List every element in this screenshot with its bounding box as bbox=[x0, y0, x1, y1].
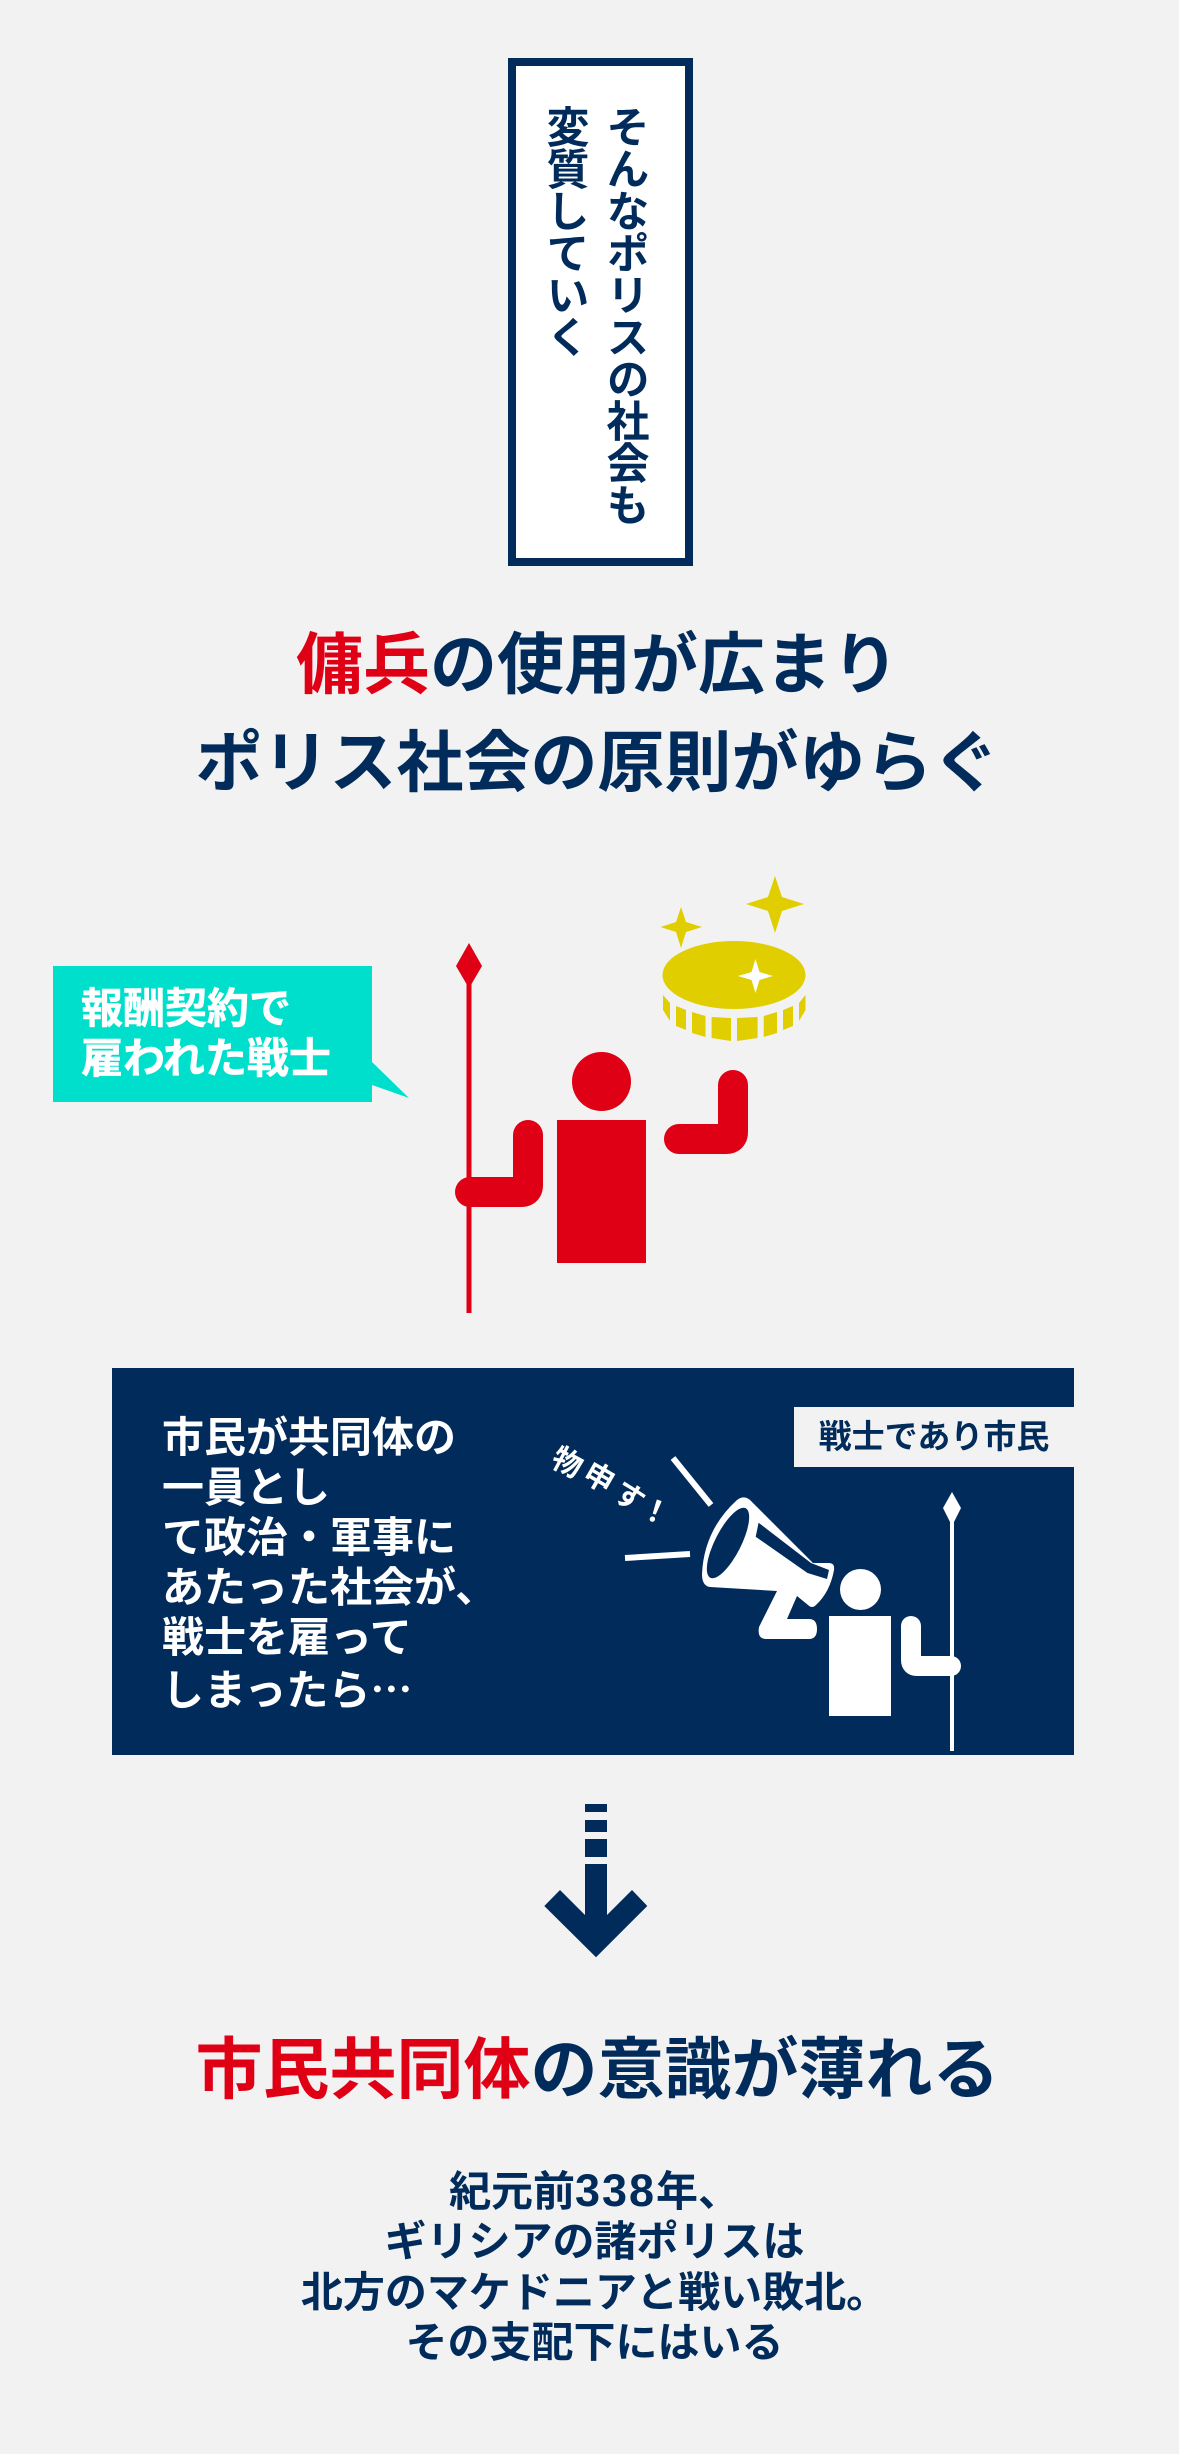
panel text: 一員とし bbox=[162, 1464, 330, 1511]
heading: civic community fades: 市民共同体の意識が薄れる bbox=[196, 2033, 1000, 2108]
icon: sparkle small bbox=[660, 907, 702, 948]
vertical text: そんなポリスの社会も bbox=[600, 105, 648, 525]
callout tail bbox=[371, 1061, 409, 1098]
illustration: soldier and coin bbox=[372, 876, 806, 1313]
vertical text: 変質していく bbox=[540, 105, 588, 357]
rotated text: speak up: 物 bbox=[546, 1442, 588, 1485]
conclusion text: その支配下にはいる bbox=[405, 2319, 784, 2366]
rays bbox=[625, 1458, 711, 1558]
heading: mercenaries: ポリス社会の原則がゆらぐ bbox=[196, 726, 1000, 801]
panel text: あたった社会が、 bbox=[162, 1564, 497, 1611]
rotated text: speak up: 申 bbox=[578, 1457, 620, 1500]
icon: white soldier bbox=[829, 1492, 961, 1751]
heading: mercenaries: 傭兵の使用が広まり bbox=[296, 628, 899, 703]
arrow: down bbox=[544, 1804, 647, 1957]
conclusion text: ギリシアの諸ポリスは bbox=[384, 2218, 804, 2265]
conclusion text bbox=[301, 2165, 888, 2366]
panel text: 市民が共同体の bbox=[162, 1414, 456, 1461]
panel: citizen soldiers bbox=[112, 1368, 1074, 1755]
rotated text: speak up: す bbox=[607, 1475, 650, 1519]
icon: sparkle large bbox=[746, 876, 804, 933]
heading: mercenaries bbox=[196, 628, 1000, 801]
icon: sparkle on coin bbox=[738, 959, 773, 993]
rotated text: speak up: ！ bbox=[635, 1492, 675, 1533]
conclusion text: 紀元前338年、 bbox=[449, 2165, 740, 2216]
panel text: 戦士を雇って bbox=[162, 1614, 412, 1661]
icon: red soldier bbox=[456, 943, 733, 1313]
icon: megaphone bbox=[699, 1497, 834, 1639]
rotated text: speak up bbox=[546, 1442, 675, 1533]
conclusion text: 北方のマケドニアと戦い敗北。 bbox=[301, 2269, 888, 2316]
callout text: 報酬契約で bbox=[81, 985, 291, 1032]
intro box: vertical text bbox=[508, 58, 693, 566]
callout text: 雇われた戦士 bbox=[81, 1035, 331, 1082]
label: soldier and citizen bbox=[794, 1407, 1074, 1467]
panel text: しまったら… bbox=[162, 1657, 412, 1718]
callout text bbox=[81, 985, 331, 1082]
panel text: て政治・軍事に bbox=[162, 1514, 456, 1561]
icon: gold coin bbox=[660, 876, 806, 1041]
panel text bbox=[162, 1414, 497, 1718]
callout: contract soldier bbox=[53, 966, 372, 1102]
vertical text bbox=[540, 105, 649, 525]
label: soldier and citizen: 戦士であり市民 bbox=[819, 1418, 1049, 1455]
